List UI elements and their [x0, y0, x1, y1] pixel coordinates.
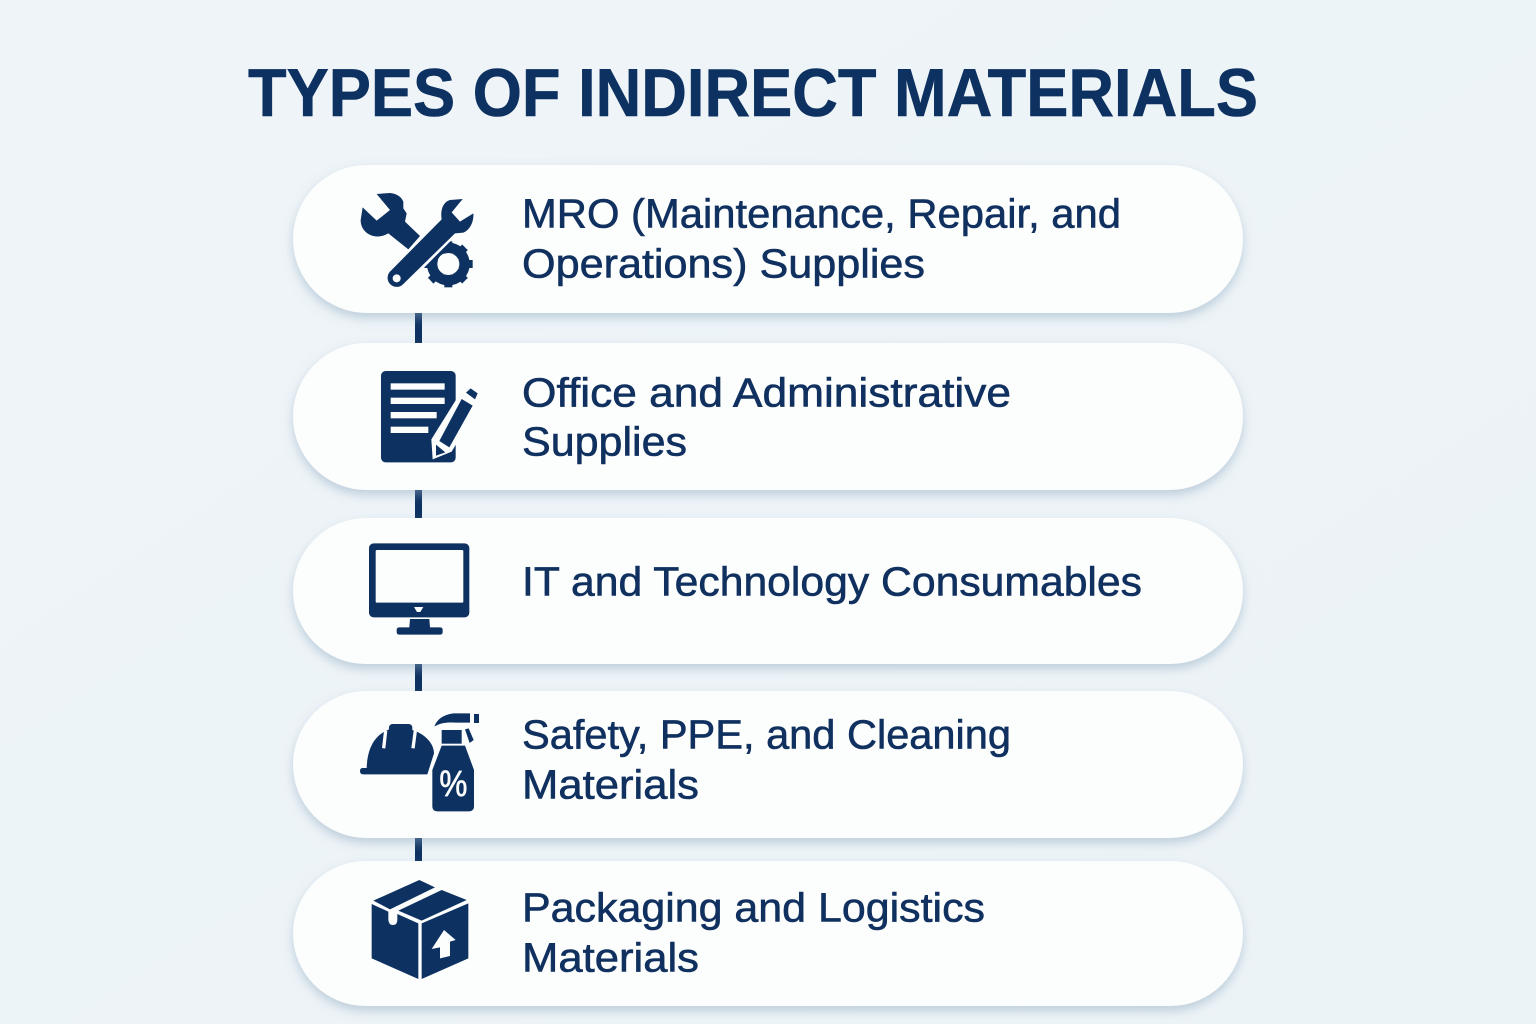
label: office: Supplies	[522, 418, 687, 464]
icon: cardboard box with up arrow	[372, 880, 468, 979]
title: TYPES OF INDIRECT MATERIALS	[248, 55, 1258, 131]
panel: packaging and logistics	[293, 861, 1243, 1006]
label: safety	[522, 712, 1011, 808]
label: safety: Safety, PPE, and Cleaning	[522, 712, 1011, 758]
panel: safety and cleaning	[293, 691, 1243, 838]
icon: hard hat and spray bottle	[360, 713, 479, 811]
icon: hard hat and spray bottle: %	[439, 763, 467, 804]
icon: computer monitor	[369, 543, 469, 635]
label: office	[522, 370, 1011, 464]
label: packaging: Packaging and Logistics	[522, 884, 985, 930]
connector lines between panels	[415, 312, 422, 861]
label: safety: Materials	[522, 762, 699, 808]
icon: crossed wrenches and gear	[361, 193, 473, 293]
label: office: Office and Administrative	[522, 370, 1011, 416]
icon: document and pencil	[381, 371, 480, 462]
label: packaging: Materials	[522, 934, 699, 980]
panel: IT consumables	[293, 518, 1243, 664]
panel: office supplies	[293, 343, 1243, 490]
panel: MRO supplies	[293, 165, 1243, 313]
label: MRO	[522, 190, 1121, 286]
label: MRO: Operations) Supplies	[522, 240, 925, 286]
label: IT: IT and Technology Consumables	[522, 558, 1142, 604]
label: MRO: MRO (Maintenance, Repair, and	[522, 190, 1121, 236]
label: packaging	[522, 884, 985, 980]
